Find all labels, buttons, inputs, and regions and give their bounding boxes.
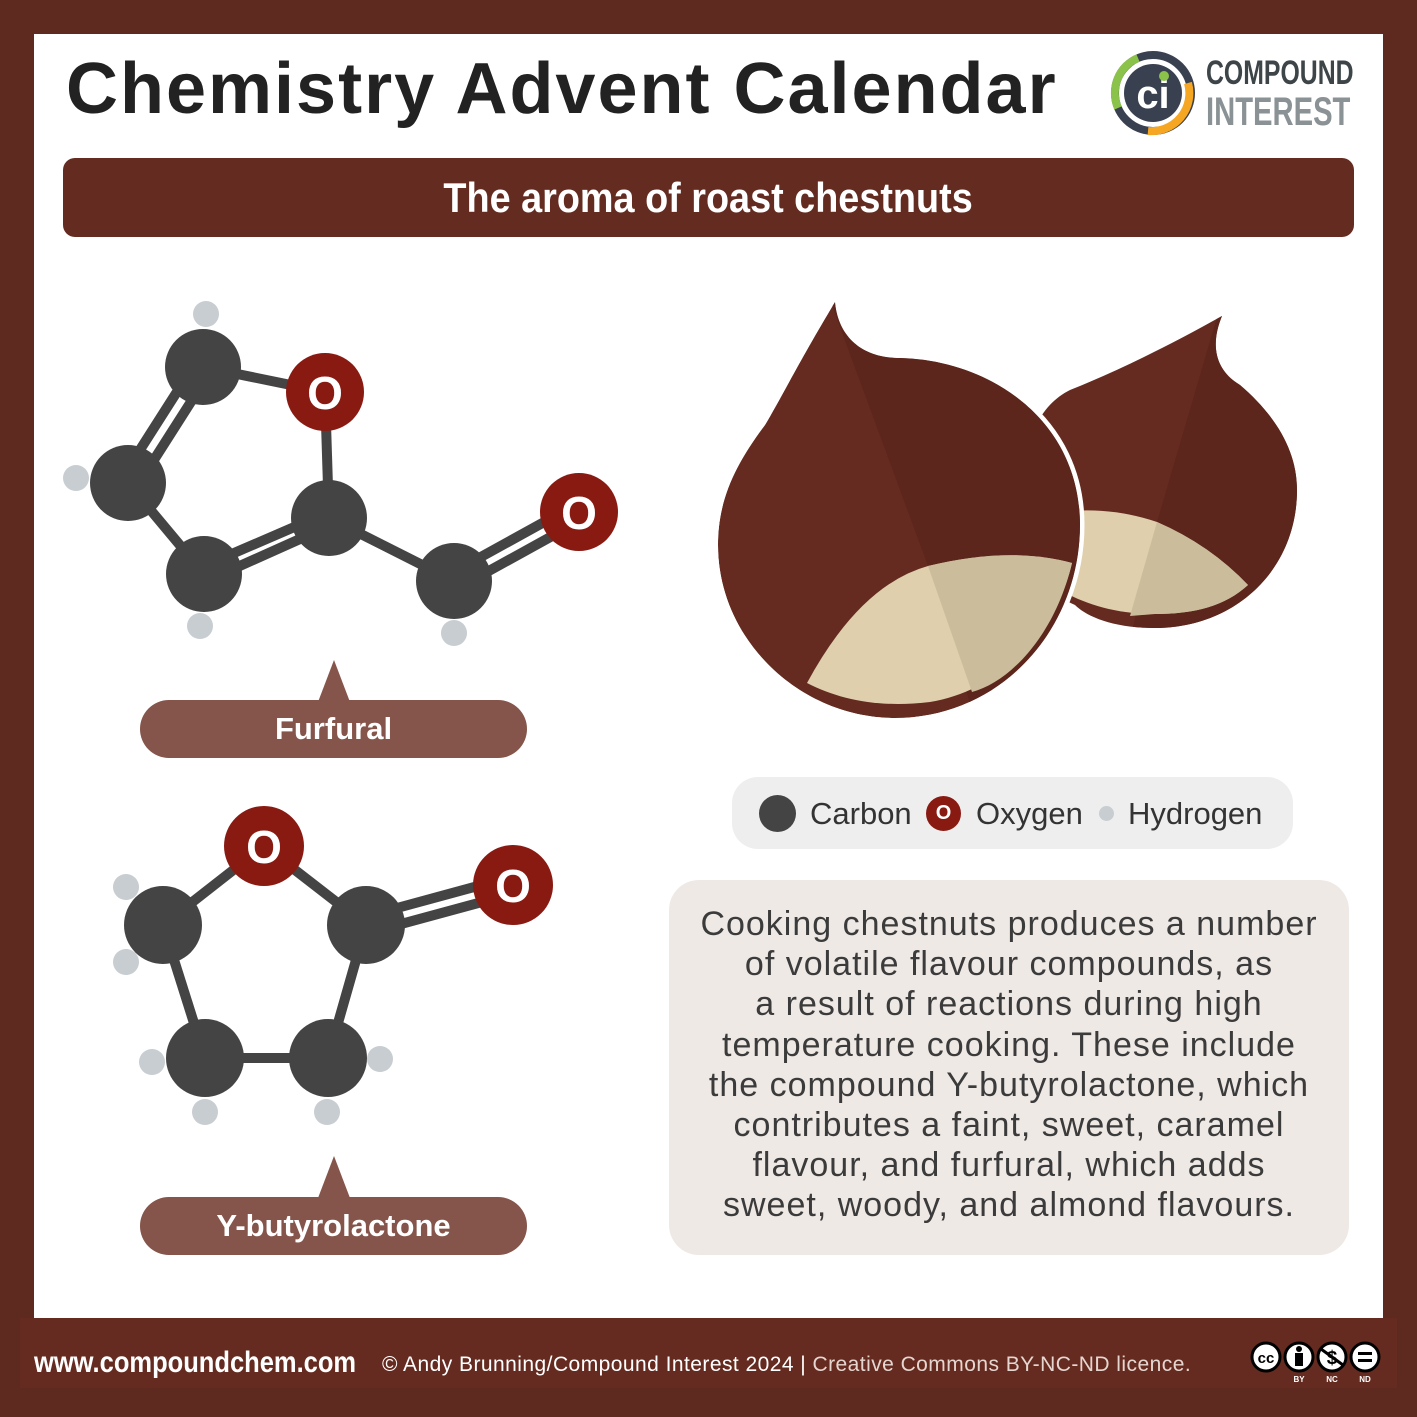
description text box: temperature cooking. These include: [722, 1026, 1296, 1064]
footer: website: www.compoundchem.com: [34, 1346, 356, 1379]
icon: CC licence: NC: [1326, 1375, 1338, 1384]
icon: CC licence: cc: [1258, 1350, 1274, 1367]
logo: Compound Interest: ci: [1136, 73, 1170, 117]
big chestnut: [718, 302, 1080, 718]
title: Chemistry Advent Calendar: [66, 49, 1058, 129]
icon: CC licence: [1250, 1342, 1380, 1384]
molecule: Y-butyrolactone: [113, 806, 553, 1125]
description text box: contributes a faint, sweet, caramel: [734, 1106, 1284, 1144]
logo: Compound Interest: [1110, 51, 1354, 136]
illustration: chestnuts: [718, 302, 1297, 718]
molecule: Y-butyrolactone: O: [246, 821, 282, 873]
footer bar: [20, 1318, 1397, 1388]
description text box: Cooking chestnuts produces a number: [700, 905, 1318, 943]
legend: hydrogen: Hydrogen: [1128, 796, 1262, 831]
description text box: a result of reactions during high: [755, 985, 1263, 1023]
banner heading: [63, 158, 1354, 237]
footer: credit: © Andy Brunning/Compound Interest 2024 | Creative Commons BY-NC-ND licence.: [382, 1353, 1191, 1376]
description text box: of volatile flavour compounds, as: [745, 945, 1273, 983]
logo: Compound Interest: COMPOUND: [1206, 54, 1354, 92]
label: Furfural: [140, 660, 527, 758]
molecule: Y-butyrolactone: O: [495, 860, 531, 912]
label: Y-butyrolactone: Y-butyrolactone: [216, 1208, 451, 1243]
legend: oxygen: Oxygen: [976, 796, 1083, 831]
legend: oxygen: [926, 796, 1083, 831]
molecule: furfural: [63, 301, 618, 646]
legend: [732, 777, 1293, 849]
description text box: [669, 880, 1349, 1255]
molecule: furfural: O: [561, 487, 597, 539]
molecule: furfural: O: [307, 367, 343, 419]
banner heading: The aroma of roast chestnuts: [444, 174, 973, 221]
icon: CC licence: BY: [1293, 1375, 1305, 1384]
description text box: the compound Y-butyrolactone, which: [709, 1066, 1309, 1104]
label: Y-butyrolactone: [140, 1156, 527, 1255]
icon: CC licence: ND: [1359, 1375, 1371, 1384]
icon: CC licence: $: [1327, 1348, 1338, 1369]
label: Furfural: Furfural: [275, 711, 392, 746]
legend: carbon: [759, 795, 912, 832]
legend: carbon: Carbon: [810, 796, 912, 831]
description text box: flavour, and furfural, which adds: [752, 1146, 1266, 1184]
small chestnut: [1042, 316, 1297, 628]
description text box: sweet, woody, and almond flavours.: [723, 1186, 1295, 1224]
legend: oxygen: O: [936, 802, 951, 824]
logo: Compound Interest: INTEREST: [1206, 90, 1350, 134]
